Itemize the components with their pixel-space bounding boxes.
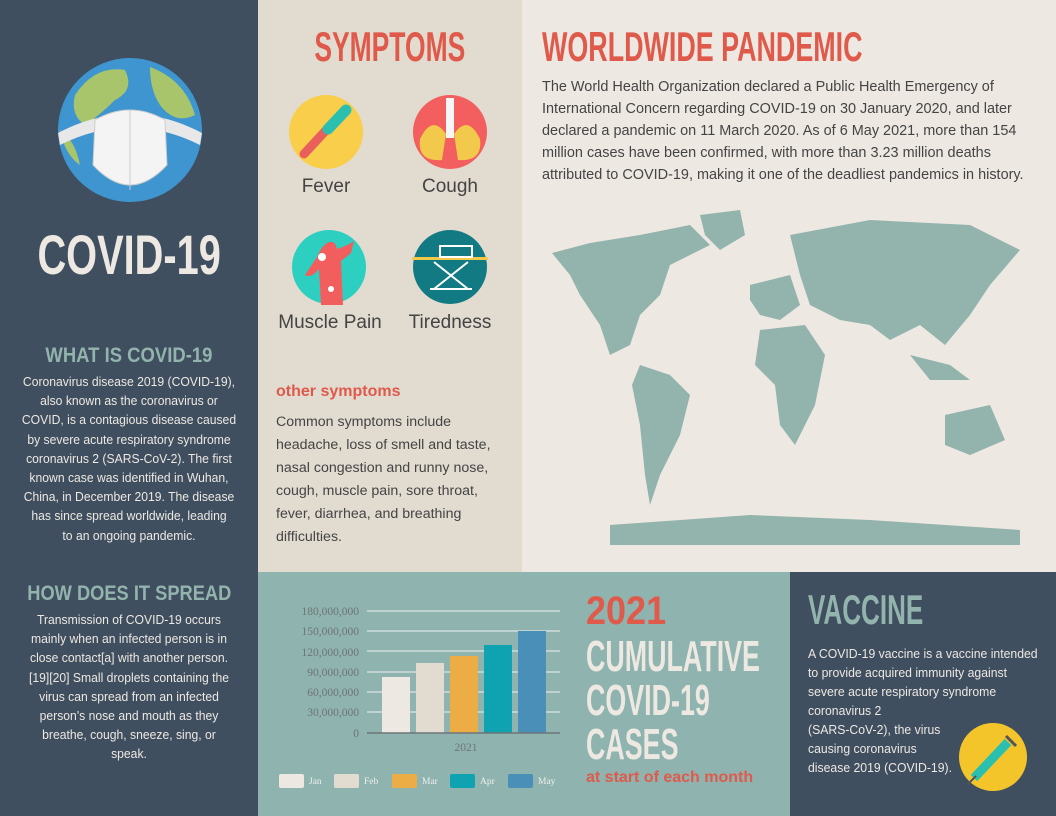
icon: muscle pain <box>292 230 366 305</box>
bar chart: 60,000,000 <box>307 687 359 699</box>
title: COVID-19: COVID-19 <box>37 223 221 286</box>
text: vaccine: A COVID-19 vaccine is a vaccine intended <box>808 646 1038 661</box>
bar chart: 30,000,000 <box>307 707 359 719</box>
world map <box>552 210 1020 545</box>
text: pandemic description: The World Health Organization declared a Public Health Emergency of <box>542 79 994 95</box>
heading: symptoms: SYMPTOMS <box>315 23 465 70</box>
text: what is <box>22 374 236 543</box>
text: vaccine: disease 2019 (COVID-19). <box>808 760 952 775</box>
text: spread: speak. <box>111 746 147 761</box>
heading: other symptoms: other symptoms <box>276 383 400 400</box>
panel: worldwide pandemic <box>522 0 1056 572</box>
text: what is: known case was identified in Wuhan, <box>29 470 229 485</box>
text: vaccine <box>808 646 1038 775</box>
label: tiredness: Tiredness <box>409 312 491 333</box>
panel: symptoms <box>258 0 522 572</box>
text: pandemic description: declared a pandemic on 11 March 2020. As of 6 May 2021, more than 154 <box>542 123 1016 139</box>
text: what is: coronavirus 2 (SARS-CoV-2). The first <box>26 451 232 466</box>
text: vaccine: (SARS-CoV-2), the virus <box>808 722 940 737</box>
text: cumulative covid-19 cases: COVID-19 <box>586 676 710 725</box>
panel: chart section <box>258 572 790 816</box>
panel: left column <box>0 0 258 816</box>
text: cumulative covid-19 cases <box>586 632 760 769</box>
text: what is: also known as the coronavirus or <box>40 393 218 408</box>
bar chart: Jan <box>309 777 322 787</box>
bar chart: 180,000,000 <box>302 606 359 618</box>
bar chart: 150,000,000 <box>302 626 359 638</box>
text: spread <box>29 612 229 761</box>
bar chart: Mar <box>422 777 439 787</box>
icon: fever <box>289 95 363 169</box>
text: what is: COVID, is a contagious disease caused <box>22 412 236 427</box>
label: fever: Fever <box>302 176 350 197</box>
text: vaccine: coronavirus 2 <box>808 703 881 718</box>
icon: tiredness <box>412 230 488 304</box>
label: muscle pain: Muscle Pain <box>278 312 382 333</box>
text: what is: by severe acute respiratory syndrome <box>27 432 231 447</box>
bar chart: 90,000,000 <box>307 667 359 679</box>
text: what is: has since spread worldwide, leading <box>31 508 227 523</box>
heading: worldwide pandemic: WORLDWIDE PANDEMIC <box>542 23 863 70</box>
heading: how does it spread: HOW DOES IT SPREAD <box>27 582 231 605</box>
text: cumulative covid-19 cases: CASES <box>586 720 678 769</box>
text: what is: to an ongoing pandemic. <box>62 528 196 543</box>
text: vaccine: to provide acquired immunity against <box>808 665 1007 680</box>
text: cumulative covid-19 cases: CUMULATIVE <box>586 632 760 681</box>
text: spread: virus can spread from an infected <box>39 689 219 704</box>
text: vaccine: causing coronavirus <box>808 741 917 756</box>
icon: cough <box>413 95 487 169</box>
bar chart: Apr <box>480 777 496 787</box>
heading: vaccine: VACCINE <box>808 586 923 633</box>
bar chart: 2021 <box>454 742 478 754</box>
bar chart: 120,000,000 <box>302 647 359 659</box>
bar chart <box>279 606 560 788</box>
icon: globe with mask <box>58 58 202 202</box>
heading: what is covid: WHAT IS COVID-19 <box>45 344 213 367</box>
text: pandemic description: International Concern regarding COVID-19 on 30 January 2020, and later <box>542 101 1012 117</box>
text: other symptoms: Common symptoms include headache, loss of smell and taste, nasal congestion and runny nose, cough, muscle pain, sore throat, fever, diarrhea, and breathing difficulties. <box>276 414 491 545</box>
bar chart: 0 <box>353 728 359 740</box>
text: spread: breathe, cough, sneeze, sing, or <box>42 727 216 742</box>
bar chart: Feb <box>364 777 378 787</box>
text: spread: mainly when an infected person is in <box>31 631 227 646</box>
label: cough: Cough <box>422 176 478 197</box>
text: what is: Coronavirus disease 2019 (COVID-19), <box>23 374 235 389</box>
text: spread: Transmission of COVID-19 occurs <box>37 612 221 627</box>
icon: syringe <box>959 723 1027 791</box>
panel: vaccine <box>790 572 1056 816</box>
caption: at start of each month: at start of each month <box>586 769 753 786</box>
text: spread: [19][20] Small droplets containing the <box>29 670 229 685</box>
text: what is: China, in December 2019. The disease <box>24 489 234 504</box>
text: pandemic description <box>542 79 1024 183</box>
text: pandemic description: attributed to COVID-19, making it one of the deadliest pandemics in history. <box>542 167 1024 183</box>
heading: 2021 cumulative cases: 2021 <box>586 589 666 633</box>
text: pandemic description: million cases have been confirmed, with more than 3.23 million deaths <box>542 145 991 161</box>
text: spread: close contact[a] with another person. <box>30 650 228 665</box>
text: vaccine: severe acute respiratory syndrome <box>808 684 996 699</box>
text: spread: person's nose and mouth as they <box>40 708 218 723</box>
bar chart: May <box>538 777 556 787</box>
